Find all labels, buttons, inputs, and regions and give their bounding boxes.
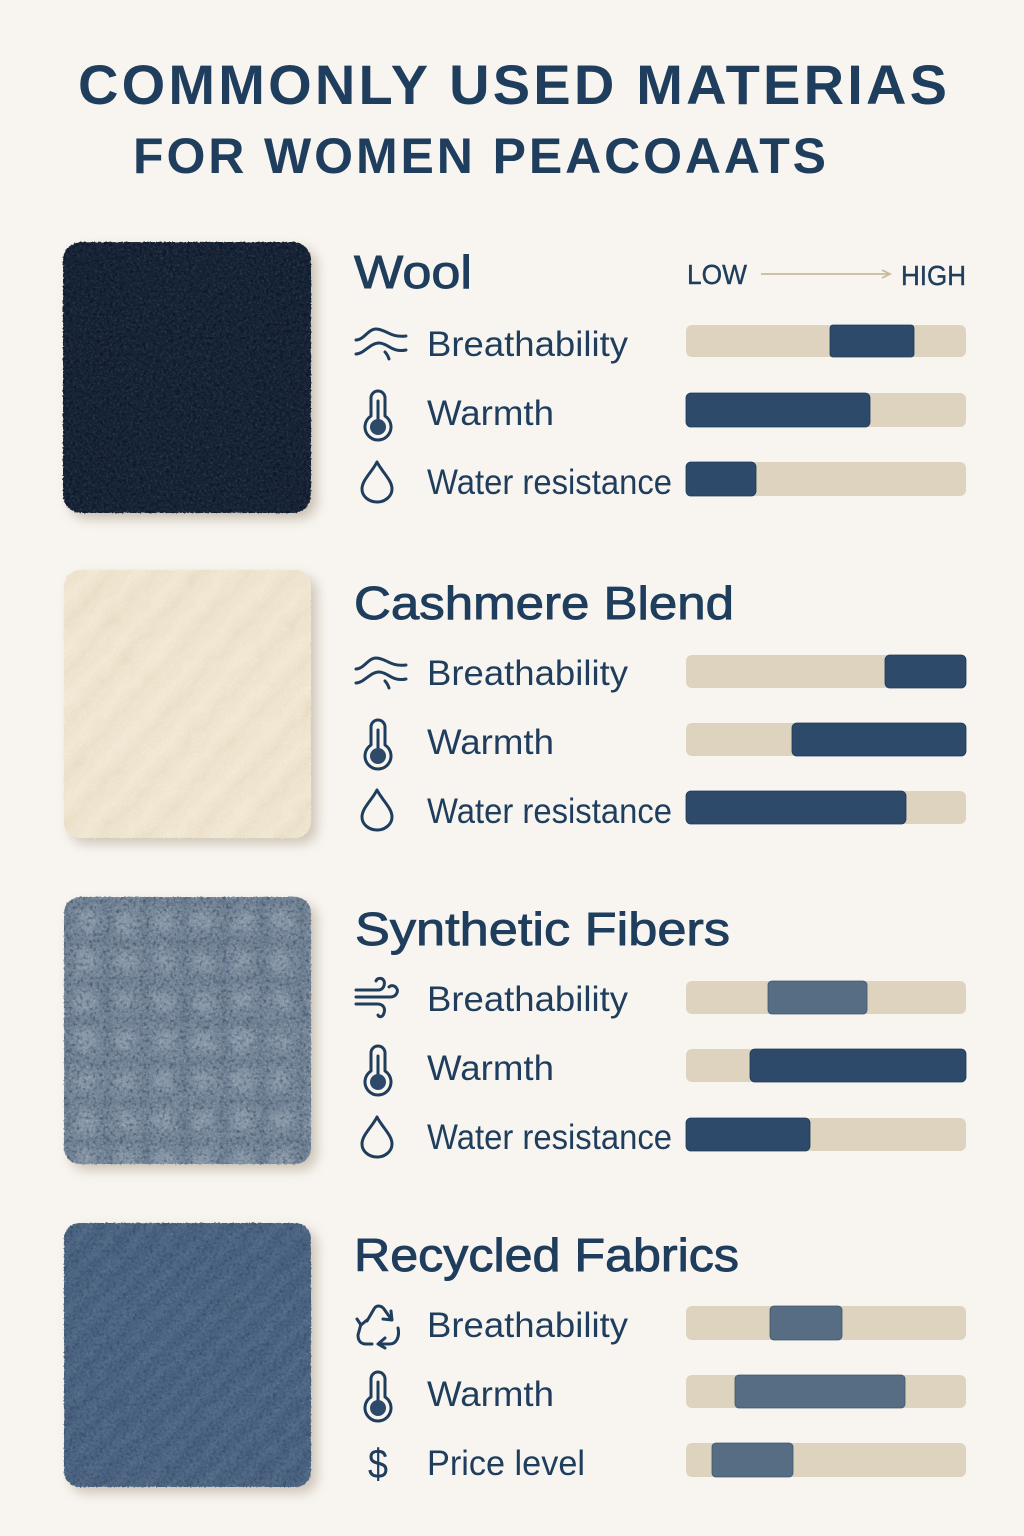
low to high legend	[687, 259, 966, 291]
bar	[686, 1049, 966, 1082]
icon: thermometer	[365, 720, 391, 769]
cashmere fabric swatch	[64, 569, 324, 850]
label: Warmth	[427, 723, 554, 762]
label: Price level	[427, 1444, 585, 1483]
icon: air waves	[356, 329, 406, 359]
bar	[686, 791, 966, 824]
icon: thermometer	[365, 391, 391, 440]
icon: wind	[356, 978, 397, 1017]
icon: air waves	[356, 658, 406, 688]
cashmere water resistance row	[362, 790, 966, 831]
bar	[686, 325, 966, 357]
label: Water resistance	[427, 463, 672, 502]
icon: thermometer	[365, 1046, 391, 1095]
recycled warmth row	[365, 1372, 966, 1421]
synthetic warmth row	[365, 1046, 966, 1095]
bar	[686, 1375, 966, 1408]
wool water resistance row	[362, 462, 966, 502]
icon: water drop	[362, 462, 392, 502]
bar	[686, 393, 966, 427]
cashmere heading: Cashmere Blend	[354, 577, 734, 629]
icon: water drop	[362, 790, 392, 830]
recycled fabric swatch	[64, 1222, 323, 1499]
bar	[686, 655, 966, 688]
cashmere breathability row	[356, 654, 966, 693]
label: Warmth	[427, 1049, 554, 1088]
bar	[686, 981, 966, 1014]
low to high legend: HIGH	[901, 260, 966, 291]
title: COMMONLY USED MATERIAS	[78, 53, 947, 116]
wool fabric swatch	[63, 242, 317, 519]
label: Breathability	[427, 654, 629, 693]
title	[78, 53, 947, 184]
title: FOR WOMEN PEACOAATS	[133, 128, 826, 184]
low to high legend: LOW	[687, 259, 748, 290]
synthetic water resistance row	[362, 1117, 966, 1157]
bar	[686, 462, 966, 496]
recycled price level row	[368, 1440, 966, 1487]
bar	[686, 723, 966, 756]
synthetic breathability row	[356, 978, 966, 1019]
wool breathability row	[356, 325, 966, 364]
bar	[686, 1443, 966, 1477]
label: Water resistance	[427, 792, 672, 831]
cashmere warmth row	[365, 720, 966, 769]
synthetic fabric swatch	[64, 896, 323, 1176]
icon: recycle arrows	[357, 1306, 399, 1348]
wool warmth row	[365, 391, 966, 440]
recycled breathability row	[357, 1306, 966, 1348]
panel: cashmere blend	[50, 556, 966, 852]
icon: water drop	[362, 1117, 392, 1157]
recycled heading: Recycled Fabrics	[354, 1229, 739, 1281]
bar	[686, 1306, 966, 1340]
panel: synthetic fibers	[50, 883, 966, 1178]
label: Breathability	[427, 1306, 629, 1345]
label: Warmth	[427, 1375, 554, 1414]
wool heading: Wool	[354, 246, 472, 298]
label: Breathability	[427, 980, 629, 1019]
label: Breathability	[427, 325, 629, 364]
icon: thermometer	[365, 1372, 391, 1421]
panel: wool	[63, 242, 966, 519]
panel: recycled fabrics	[50, 1209, 966, 1501]
synthetic heading: Synthetic Fibers	[355, 903, 730, 955]
bar	[686, 1118, 966, 1151]
icon: dollar sign: $	[368, 1440, 388, 1487]
label: Warmth	[427, 394, 554, 433]
label: Water resistance	[427, 1118, 672, 1157]
